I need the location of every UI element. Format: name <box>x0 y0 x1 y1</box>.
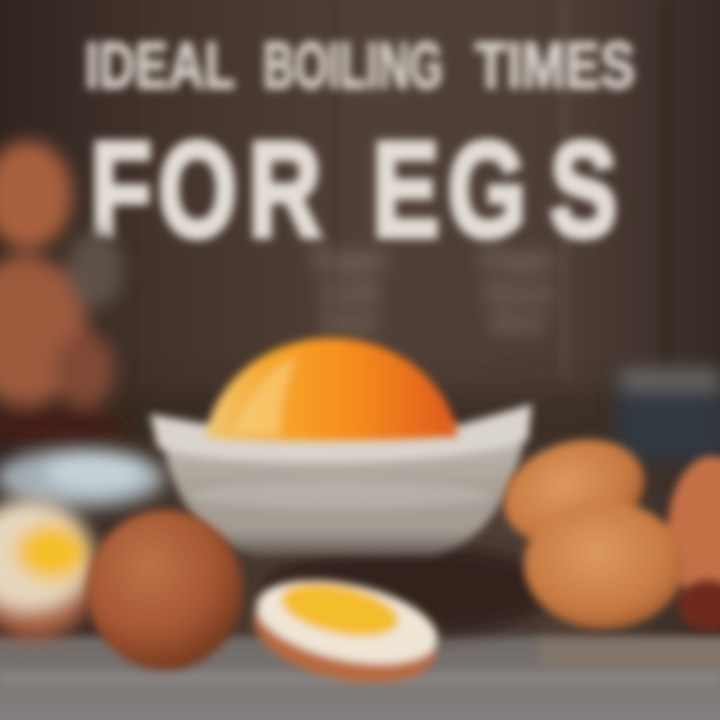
title line 1: BOILING <box>263 28 443 102</box>
faint subtitle text: Hard <box>484 277 552 310</box>
right background jar <box>615 368 720 462</box>
faint subtitle text: Boil <box>492 307 544 338</box>
table surface <box>0 636 720 720</box>
large brown egg in front <box>87 510 243 670</box>
halved egg at left <box>0 499 97 640</box>
faint subtitle text: Soft <box>321 277 379 310</box>
halved egg in front <box>245 566 445 697</box>
faint subtitle text <box>313 242 555 338</box>
title line 1: TIMES <box>475 28 635 102</box>
title line 2: EGS <box>372 115 617 265</box>
right brown eggs <box>490 422 720 631</box>
dark shadow under bowl <box>260 544 560 636</box>
faint subtitle text: Eggs <box>481 242 555 275</box>
metal bowl <box>150 404 532 556</box>
left stack of brown eggs <box>0 141 125 443</box>
orange yolk in bowl <box>205 338 458 441</box>
left blue dish <box>0 448 165 508</box>
title line 2: FOR <box>90 115 321 265</box>
title line 2 <box>90 115 617 265</box>
faint subtitle text: Boil <box>324 307 376 338</box>
title line 1 <box>85 28 635 102</box>
title line 1: IDEAL <box>85 28 235 102</box>
faint subtitle text: Eggs <box>313 242 387 275</box>
